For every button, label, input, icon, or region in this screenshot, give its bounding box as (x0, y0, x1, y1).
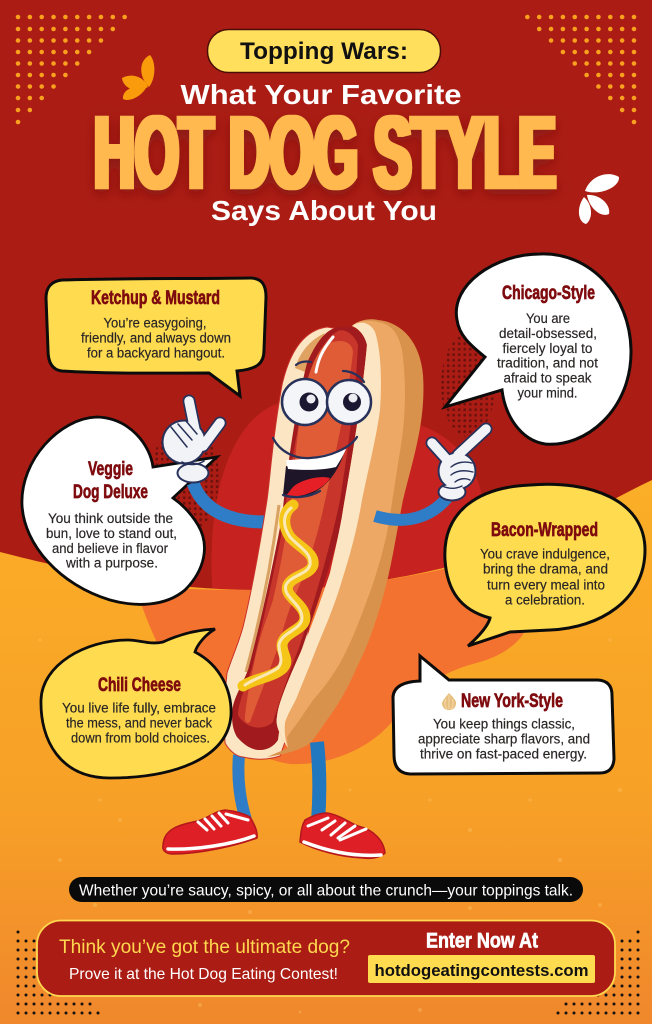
mouth (273, 437, 357, 497)
website box (368, 955, 595, 983)
speech bubble: Bacon-Wrapped (445, 484, 645, 646)
character: hot dog mascot (162, 319, 486, 858)
shoe: right (300, 813, 385, 858)
leg: right (317, 742, 319, 822)
body text: You keep things classic, (433, 716, 575, 732)
bun inner edge (246, 505, 279, 672)
call to action panel (37, 920, 615, 996)
body text: appreciate sharp flavors, and (418, 732, 590, 746)
body text: with a purpose. (65, 556, 158, 570)
speech bubble: Chili Cheese (41, 629, 231, 778)
leg: left (238, 755, 246, 820)
tagline pill (69, 877, 583, 902)
heading: Bacon-Wrapped (491, 519, 598, 541)
body text: friendly, and always down (81, 330, 231, 346)
mustard squiggle (243, 505, 313, 686)
body text: your mind. (518, 386, 578, 400)
website box: hotdogeatingcontests.com (374, 961, 588, 980)
bun: right half (267, 319, 423, 757)
body text: thrive on fast-paced energy. (420, 746, 587, 762)
halftone: right of character (441, 333, 495, 437)
sausage (232, 327, 367, 750)
dot pattern: top left (18, 17, 126, 122)
heading: Says About You: Says About You (211, 195, 437, 226)
body text (497, 311, 598, 400)
icon: white burst (579, 174, 619, 224)
body text: tradition, and not (497, 356, 598, 370)
glove: right (432, 429, 486, 502)
body text (81, 316, 231, 360)
heading: What Your Favorite: What Your Favorite (180, 79, 462, 110)
body text (46, 511, 177, 570)
heading: Chicago-Style (502, 282, 595, 304)
heading: New York-Style (461, 690, 563, 712)
background: red circle behind character (212, 400, 484, 600)
dot pattern: bottom left (18, 932, 99, 1013)
body text: the mess, and never back (66, 716, 212, 730)
title pill: Topping Wars (208, 30, 440, 72)
speech bubble: Chicago-Style (445, 254, 631, 444)
dot pattern: top right (526, 17, 634, 122)
speech bubble: Veggie Dog Deluxe (22, 417, 217, 604)
eyebrows (296, 361, 364, 382)
body text: bun, love to stand out, (46, 526, 177, 541)
background: orange lower wave (0, 480, 652, 1024)
body text: detail-obsessed, (499, 326, 597, 341)
body text: a celebration. (505, 592, 585, 608)
shoe: left (163, 810, 257, 854)
dot pattern: bottom right (557, 932, 638, 1013)
CTA heading: Enter Now At (426, 930, 538, 952)
speech bubble: New York-Style (393, 656, 614, 774)
background: darker orange blob (135, 563, 531, 764)
eye: right (327, 380, 371, 424)
heading: Dog Deluxe: Dog Deluxe (73, 481, 148, 503)
tagline pill: Whether you’re saucy, spicy, or all about the crunch—your toppings talk. (79, 882, 573, 900)
CTA subtext: Prove it at the Hot Dog Eating Contest! (69, 966, 338, 983)
bun: left half (224, 327, 345, 759)
body text: bring the drama, and (483, 562, 608, 576)
body text: You live life fully, embrace (62, 700, 216, 716)
arm: left (193, 483, 265, 522)
icon: orange burst (122, 55, 154, 100)
body text: You are (526, 311, 570, 326)
body text: down from bold choices. (71, 730, 210, 746)
CTA question: Think you’ve got the ultimate dog? (59, 936, 350, 958)
body text: turn every meal into (487, 578, 605, 592)
body text (418, 716, 590, 762)
speech bubble: Ketchup & Mustard (46, 278, 266, 396)
icon: onion (442, 693, 456, 710)
body text: fiercely loyal to (502, 341, 592, 356)
bun shading (295, 333, 325, 372)
body text: You think outside the (48, 511, 173, 526)
heading: Ketchup & Mustard (91, 287, 220, 309)
glove: left (162, 401, 220, 484)
body text: You’re easygoing, (104, 316, 206, 330)
heading: Veggie: Veggie (88, 458, 133, 480)
arm: right (375, 498, 447, 520)
eye: left (282, 379, 328, 425)
halftone: left of character (151, 422, 219, 534)
texture specks (38, 638, 622, 1014)
body text: for a backyard hangout. (87, 346, 225, 360)
body text: and believe in flavor (52, 541, 168, 556)
body text: afraid to speak (504, 370, 592, 386)
body text: You crave indulgence, (480, 546, 610, 562)
heading: Chili Cheese (98, 674, 181, 696)
body text (480, 546, 610, 608)
body text (62, 700, 216, 746)
title pill: Topping Wars: Topping Wars: (240, 38, 408, 65)
